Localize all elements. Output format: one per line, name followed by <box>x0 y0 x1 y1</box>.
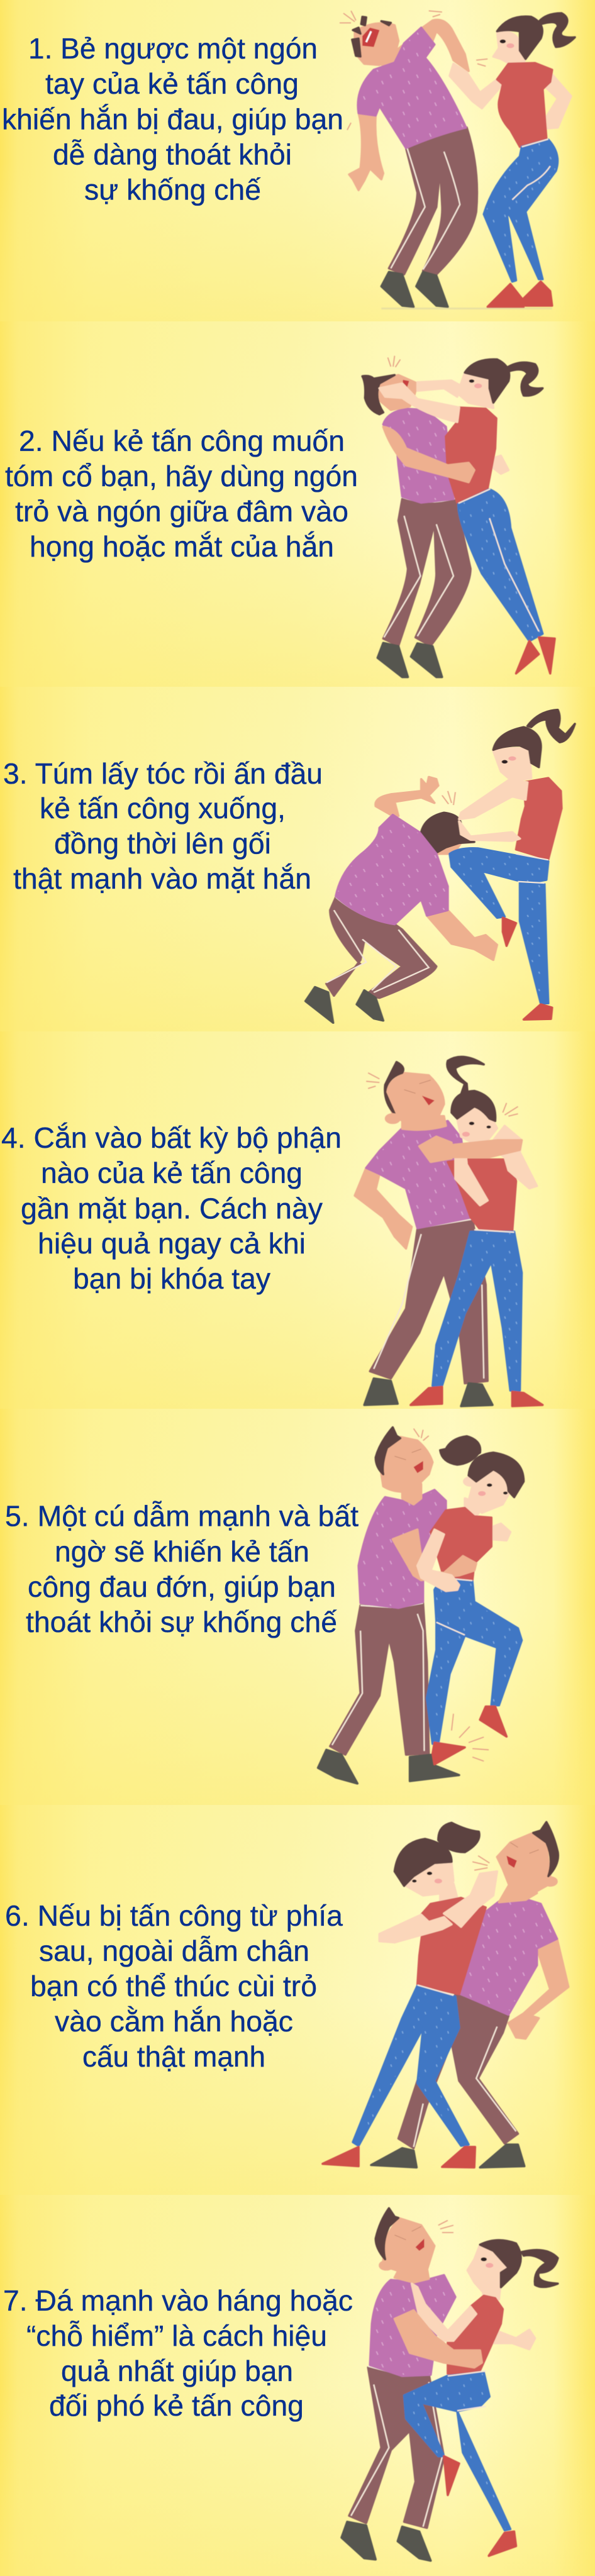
text block: step 1: tay của kẻ tấn công <box>45 67 299 100</box>
man figure <box>342 2208 455 2561</box>
text block: step 4: bạn bị khóa tay <box>73 1262 270 1295</box>
text block: step 6: sau, ngoài dẫm chân <box>39 1935 309 1967</box>
text block: step 2: họng hoặc mắt của hắn <box>30 530 334 563</box>
text block: step 4: hiệu quả ngay cả khi <box>38 1227 306 1260</box>
panel: step 3 knee strike <box>0 687 595 1031</box>
text block: step 5: 5. Một cú dẫm mạnh và bất <box>5 1499 359 1532</box>
text block: step 1: 1. Bẻ ngược một ngón <box>28 32 318 65</box>
text block: step 1 <box>2 32 343 206</box>
woman figure <box>379 359 555 674</box>
panel: step 2 jab throat or eyes <box>0 321 595 687</box>
text block: step 7: “chỗ hiểm” là cách hiệu <box>26 2319 327 2352</box>
text block: step 5: thoát khỏi sự khống chế <box>26 1606 337 1638</box>
panel background <box>0 687 595 1031</box>
panel background <box>0 2195 595 2576</box>
man figure <box>306 777 497 1023</box>
panel: step 4 bite <box>0 1031 595 1409</box>
text block: step 7: quả nhất giúp bạn <box>61 2355 293 2387</box>
woman figure <box>404 2240 558 2556</box>
text block: step 7: đối phó kẻ tấn công <box>49 2389 304 2422</box>
panel: step 7 kick the groin <box>0 2195 595 2576</box>
text block: step 1: khiến hắn bị đau, giúp bạn <box>2 103 343 136</box>
text block: step 2 <box>5 425 358 563</box>
panel background <box>0 1409 595 1805</box>
illustration: step 2 figures <box>362 356 555 677</box>
text block: step 6: 6. Nếu bị tấn công từ phía <box>5 1899 343 1932</box>
man's forearm across neck <box>420 1136 522 1162</box>
woman figure <box>427 1436 524 1764</box>
illustration: step 6 figures <box>323 1822 569 2167</box>
panel background <box>0 321 595 687</box>
text block: step 1: dễ dàng thoát khỏi <box>53 138 292 171</box>
man figure <box>340 11 487 307</box>
text block: step 3 <box>3 757 323 895</box>
man figure <box>355 1062 518 1406</box>
text block: step 2: tóm cổ bạn, hãy dùng ngón <box>5 460 358 492</box>
illustration: step 4 figures <box>355 1057 543 1406</box>
man's arm on waist <box>394 2311 482 2367</box>
panel: step 6 elbow from behind <box>0 1805 595 2195</box>
text block: step 6: cấu thật mạnh <box>82 2040 265 2073</box>
text block: step 5: ngờ sẽ khiến kẻ tấn <box>55 1535 309 1568</box>
text block: step 6: bạn có thể thúc cùi trỏ <box>30 1970 317 2002</box>
text block: step 3: kẻ tấn công xuống, <box>40 792 286 824</box>
ground shadow <box>381 308 552 309</box>
text block: step 5: công đau đớn, giúp bạn <box>28 1570 336 1603</box>
text block: step 7 <box>3 2284 353 2422</box>
woman figure <box>411 1057 543 1406</box>
illustration: step 5 figures <box>318 1428 524 1784</box>
illustration: step 1 figures <box>340 11 575 309</box>
text block: step 5 <box>5 1499 359 1638</box>
man's arm around waist <box>383 427 474 482</box>
text block: step 2: trỏ và ngón giữa đâm vào <box>15 495 348 528</box>
text block: step 3: thật mạnh vào mặt hắn <box>13 862 311 895</box>
illustration: step 7 figures <box>342 2208 558 2561</box>
text block: step 4: gần mặt bạn. Cách này <box>21 1192 323 1225</box>
text block: step 1: sự khống chế <box>84 174 261 206</box>
man figure <box>318 1428 489 1784</box>
text block: step 3: 3. Túm lấy tóc rồi ấn đầu <box>3 757 323 790</box>
panel background <box>0 0 595 321</box>
man figure <box>362 356 470 677</box>
text block: step 6: vào cằm hắn hoặc <box>55 2005 293 2038</box>
panel: step 1 bend finger back <box>0 0 595 321</box>
illustration: step 3 figures <box>306 710 575 1023</box>
text block: step 4: nào của kẻ tấn công <box>41 1157 303 1189</box>
text block: step 4: 4. Cắn vào bất kỳ bộ phận <box>1 1121 342 1154</box>
text block: step 3: đồng thời lên gối <box>54 827 271 860</box>
woman figure <box>450 13 575 307</box>
arms <box>392 1530 476 1591</box>
woman figure <box>450 710 575 1019</box>
text block: step 7: 7. Đá mạnh vào háng hoặc <box>3 2284 353 2317</box>
panel background <box>0 1805 595 2195</box>
text block: step 2: 2. Nếu kẻ tấn công muốn <box>19 425 345 457</box>
text block: step 4 <box>1 1121 342 1295</box>
text block: step 6 <box>5 1899 343 2073</box>
panel background <box>0 1031 595 1409</box>
woman figure <box>323 1823 497 2167</box>
man figure <box>371 1822 569 2167</box>
panel: step 5 stomp <box>0 1409 595 1805</box>
